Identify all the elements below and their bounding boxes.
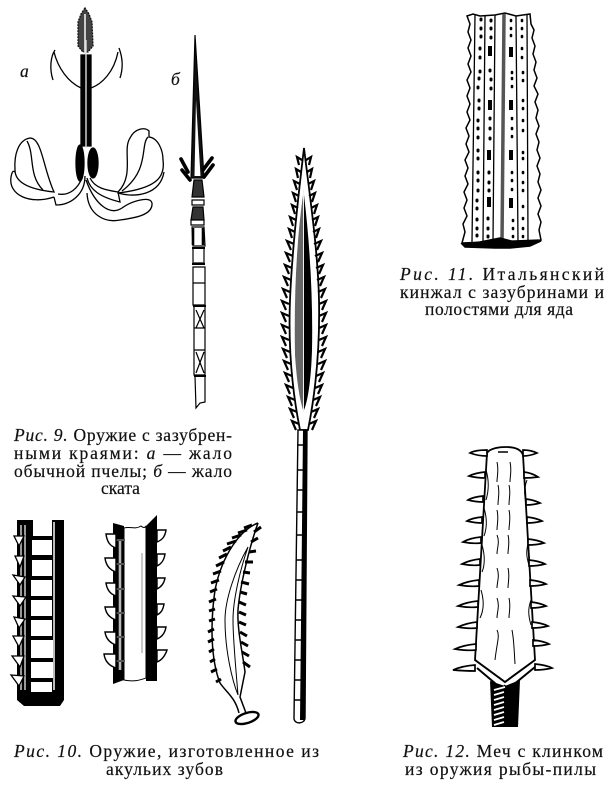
shaft rings: [192, 248, 206, 376]
sting shaft: [81, 55, 91, 146]
line 4: ската: [101, 478, 140, 498]
curved leaf-shaped weapon: [208, 523, 261, 726]
side barbs: [181, 158, 213, 180]
barb blade: [191, 35, 204, 178]
right barbs: [306, 157, 326, 430]
teeth: [11, 536, 26, 686]
figure 10: shark tooth weapons: [11, 515, 261, 726]
figure 9a: bee sting: [11, 8, 164, 221]
left serrations: [208, 525, 252, 682]
second band: [191, 220, 204, 225]
blade outline: [290, 148, 319, 430]
slots right: [509, 47, 513, 208]
right teeth: [523, 450, 552, 670]
fullers: [472, 15, 528, 242]
label a: а: [20, 61, 29, 81]
figure 12: sawfish sword: [453, 447, 552, 727]
shaft dark side: [300, 430, 307, 720]
poison holes inner left column: [488, 20, 491, 237]
tip spine: [84, 14, 86, 54]
center ridge: [502, 14, 504, 244]
tang threads: [494, 687, 505, 725]
caption: figure 9: [13, 425, 232, 498]
white panels: [31, 519, 53, 692]
poison holes right column: [522, 20, 523, 237]
light strips: [119, 540, 121, 670]
left dark core: [295, 195, 303, 410]
line 1: Рис. 9. Оружие с зазубрен-: [13, 425, 232, 445]
lower shaft: [193, 248, 205, 408]
binding: [116, 540, 125, 661]
shaft band: [192, 200, 204, 205]
left venom bulb: [76, 145, 84, 181]
outline: [212, 523, 258, 713]
line 3: обычной пчелы; б — жало: [14, 461, 232, 481]
upper shaft segments: [192, 180, 204, 197]
left teeth: [104, 534, 116, 668]
line 1: Рис. 10. Оружие, изготовленное из: [13, 741, 319, 761]
blade edges: [462, 13, 541, 243]
chevron guard: [475, 660, 535, 690]
right teeth: [157, 530, 167, 662]
top mark: [498, 451, 508, 453]
right venom bulb: [88, 148, 98, 178]
knob: [234, 710, 260, 726]
weapon fragment two: [104, 515, 167, 684]
center seam: [302, 190, 304, 412]
blade: [475, 447, 535, 679]
barbed tip: [78, 8, 93, 52]
poison holes inner right column: [511, 20, 513, 237]
caption: figure 10: [13, 741, 319, 779]
line 3: полостями для яда: [425, 299, 573, 319]
dark lower section: [192, 227, 205, 246]
right lobes: [86, 129, 164, 221]
poison holes left column: [477, 19, 481, 236]
line 2: из оружия рыбы-пилы: [405, 759, 596, 779]
spear shaft: [294, 430, 307, 723]
palps: [51, 48, 122, 88]
right dark core: [304, 195, 312, 410]
line 1: Рис. 11. Итальянский: [399, 264, 604, 284]
line 2: ными краями: а — жало: [14, 443, 232, 463]
left teeth: [453, 450, 487, 671]
blade white: [124, 526, 146, 681]
blade inner wedge: [194, 100, 200, 176]
label б: б: [171, 69, 181, 89]
hilt break: [462, 238, 541, 248]
midrib: [225, 547, 248, 695]
right serrations: [239, 527, 261, 667]
shaft highlight: [85, 40, 87, 148]
line 2: кинжал с зазубринами и: [400, 282, 604, 302]
figure 11: serrated dagger: [462, 13, 541, 248]
dark strips: [113, 515, 157, 684]
dark section: [191, 207, 204, 220]
blade inner dashes: [480, 462, 531, 664]
slots left: [489, 46, 490, 207]
line 1: Рис. 12. Меч с клинком: [402, 741, 603, 761]
shaft bands: [294, 445, 304, 700]
tang: [490, 680, 520, 727]
caption: figure 11: [399, 264, 604, 319]
line 2: акульих зубов: [106, 759, 223, 779]
section shading: [193, 228, 203, 245]
figure 9b: stingray barb: [171, 35, 213, 408]
panel hatch: [53, 522, 55, 690]
body: [17, 520, 64, 706]
left barbs: [282, 157, 302, 430]
caption: figure 12: [402, 741, 603, 779]
left lobes: [11, 138, 85, 205]
center scratch: [141, 553, 143, 653]
central serrated spear: [282, 148, 326, 723]
weapon fragment one: [11, 519, 64, 706]
left hatch: [21, 525, 25, 690]
